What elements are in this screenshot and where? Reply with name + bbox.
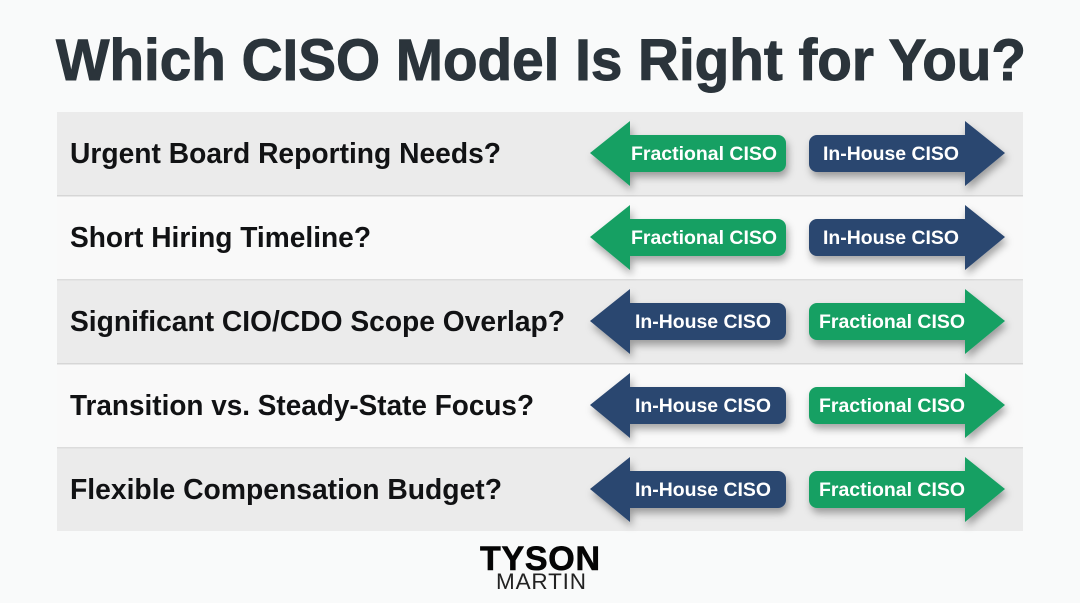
arrow: in-house left: In-House CISO — [635, 311, 771, 333]
arrow: in-house right — [809, 205, 1005, 270]
arrow: fractional left — [590, 205, 786, 270]
arrow: in-house right — [809, 121, 1005, 186]
arrow: fractional right — [809, 457, 1005, 522]
arrow: in-house left — [590, 373, 786, 438]
arrow: in-house left: In-House CISO — [635, 395, 771, 417]
question 5: Flexible Compensation Budget? — [70, 474, 502, 506]
row 5: compensation budget — [57, 448, 1023, 531]
row 2: short hiring timeline — [57, 196, 1023, 280]
arrow: in-house left: In-House CISO — [635, 479, 771, 501]
arrow: fractional right — [809, 289, 1005, 354]
row 3: scope overlap — [57, 280, 1023, 364]
arrow: fractional left: Fractional CISO — [631, 143, 777, 165]
arrow: in-house right: In-House CISO — [823, 227, 959, 249]
question 2: Short Hiring Timeline? — [70, 222, 371, 254]
row 4: transition focus — [57, 364, 1023, 448]
arrow: in-house right: In-House CISO — [823, 143, 959, 165]
arrow: fractional right — [809, 373, 1005, 438]
question 3: Significant CIO/CDO Scope Overlap? — [70, 306, 565, 338]
arrow: in-house left — [590, 289, 786, 354]
question 4: Transition vs. Steady-State Focus? — [70, 390, 534, 422]
arrow: fractional right: Fractional CISO — [819, 479, 965, 501]
question 1: Urgent Board Reporting Needs? — [70, 138, 501, 170]
arrow: fractional left: Fractional CISO — [631, 227, 777, 249]
title: Which CISO Model Is Right for You? — [56, 28, 1026, 93]
logo: Tyson Martin: TYSON — [480, 540, 600, 578]
row 1: urgent board reporting — [57, 112, 1023, 196]
arrow: fractional left — [590, 121, 786, 186]
logo: Tyson Martin: MARTIN — [496, 569, 586, 594]
arrow: fractional right: Fractional CISO — [819, 395, 965, 417]
arrow: in-house left — [590, 457, 786, 522]
arrow: fractional right: Fractional CISO — [819, 311, 965, 333]
